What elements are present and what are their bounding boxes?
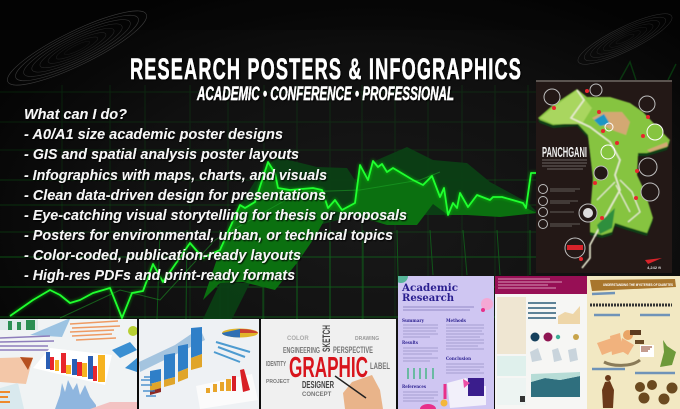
word cloud: ENGINEERING (283, 345, 320, 355)
services list: What can I do? (24, 106, 127, 123)
word cloud: PERSPECTIVE (333, 345, 373, 355)
poster: Academic Research: Research (402, 293, 455, 304)
word: DESIGNER: DESIGNER (302, 379, 334, 391)
chart: bright green area (203, 161, 537, 300)
poster: human figure (602, 381, 614, 408)
services list: - Eye-catching visual storytelling for thesis or proposals (24, 207, 407, 224)
word cloud: COLOR (287, 336, 309, 342)
poster: research data (495, 276, 587, 409)
map: logo (645, 258, 662, 264)
poster: section labels: Conclusion (446, 356, 472, 362)
poster: section labels: Summary (402, 318, 424, 324)
poster: section labels: Results (402, 340, 418, 346)
poster: section labels: Methods (446, 318, 466, 324)
word: GRAPHIC: GRAPHIC (289, 352, 368, 384)
word cloud: CONCEPT (302, 392, 332, 398)
word cloud (266, 325, 390, 398)
services list: - A0/A1 size academic poster designs (24, 126, 283, 143)
services list: - Posters for environmental, urban, or technical topics (24, 227, 393, 244)
poster: mini chart (408, 368, 433, 379)
map poster: Panchgani (536, 80, 672, 273)
photo: bar charts on papers (0, 319, 138, 409)
map: location pins (552, 89, 650, 261)
word cloud: IDENTITY (266, 361, 286, 368)
map: circular icons (538, 84, 663, 258)
services list: - Infographics with maps, charts, and visuals (24, 167, 327, 184)
poster: diabetes infographic (587, 276, 680, 409)
decorative spiral: top right (573, 5, 677, 73)
map: description lines (542, 160, 587, 169)
services list: - High-res PDFs and print-ready formats (24, 267, 295, 284)
map: terrain (538, 89, 670, 268)
map: heading: PANCHGANI (542, 144, 587, 161)
word cloud: SKETCH (321, 325, 333, 352)
poster: heading: Academic (401, 283, 458, 294)
map poster: Panchgani: 4,242 ft (647, 265, 662, 270)
decorative grid (0, 62, 676, 320)
poster: banner (590, 279, 676, 291)
chart: 3D bars (150, 327, 202, 395)
photo: graphic designer word cloud (261, 319, 396, 409)
word cloud: LABEL (370, 361, 390, 371)
word cloud: PROJECT (266, 379, 290, 385)
chart: neon line (10, 161, 537, 318)
services list: - Clean data-driven design for presentations (24, 187, 326, 204)
services list: - GIS and spatial analysis poster layouts (24, 146, 299, 163)
poster: Academic Research (394, 269, 494, 409)
poster: illustration (447, 378, 486, 408)
poster: section labels (402, 318, 472, 390)
decorative spiral: top left (0, 0, 154, 97)
services list: - Color-coded, publication-ready layouts (24, 247, 301, 264)
hand with pen (335, 375, 383, 409)
services list (24, 106, 407, 284)
subtitle: ACADEMIC • CONFERENCE • PROFESSIONAL (196, 84, 454, 105)
chart: bars on paper (33, 348, 112, 385)
photo: 3D bar chart on papers (139, 319, 259, 409)
word cloud: DRAWING (355, 336, 379, 342)
chart: dark green area (203, 147, 537, 319)
poster: section labels: References (402, 384, 426, 390)
